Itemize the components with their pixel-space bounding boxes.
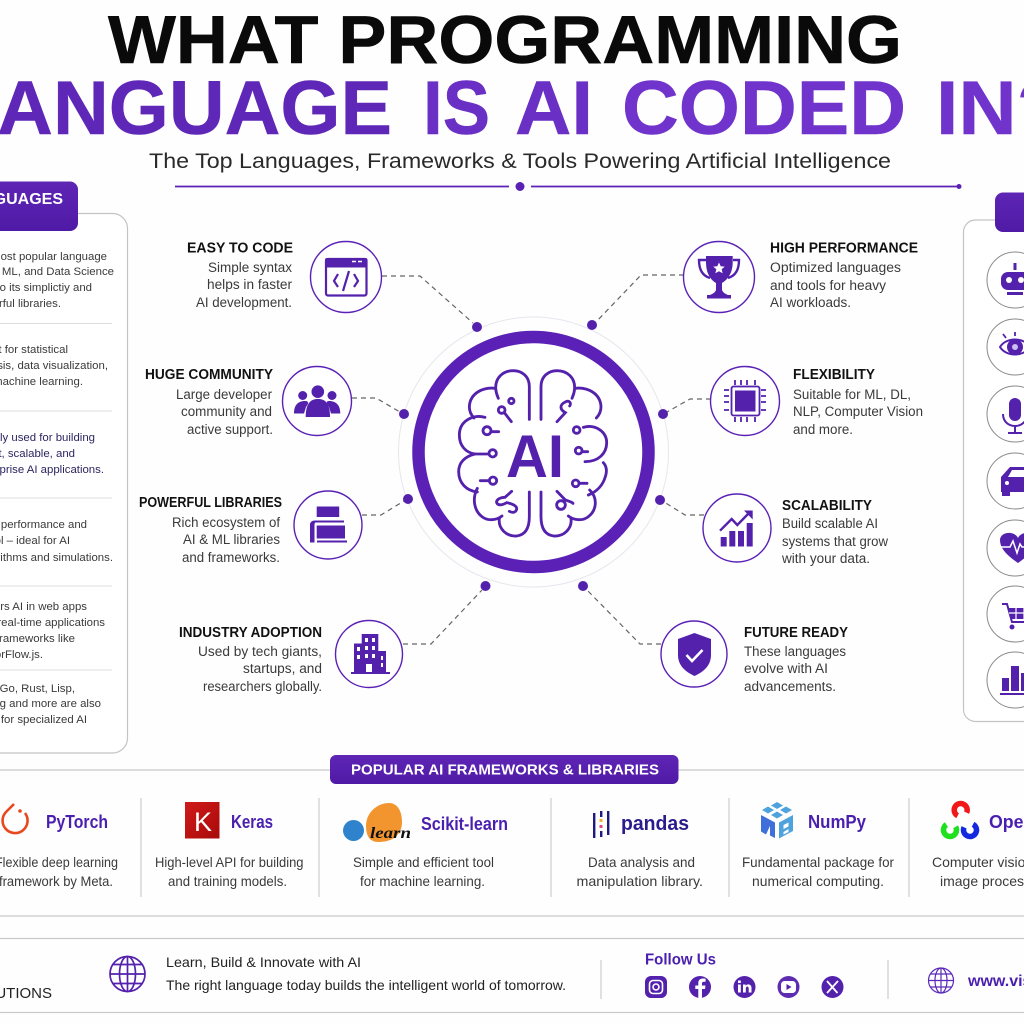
framework: Scikit-learn — [343, 803, 508, 889]
icon: trophy — [699, 256, 739, 298]
feature: huge community: Large developer — [176, 387, 272, 402]
icon: circuit brain — [459, 371, 607, 536]
footer tagline — [166, 954, 566, 993]
framework: Keras: Keras — [231, 812, 273, 832]
feature: scalability: with your data. — [781, 551, 870, 566]
icon: LinkedIn — [734, 976, 756, 998]
icon: heart pulse — [987, 520, 1024, 576]
subtitle: The Top Languages, Frameworks & Tools Powering Artificial Intelligence — [149, 150, 891, 173]
framework: NumPy: Fundamental package for — [742, 854, 894, 870]
framework: Scikit-learn: for machine learning. — [360, 873, 485, 889]
feature: scalability: Build scalable AI — [782, 516, 878, 531]
framework: NumPy: numerical computing. — [752, 873, 884, 889]
framework: PyTorch: framework by Meta. — [0, 873, 113, 889]
logo: pandas — [593, 811, 609, 838]
feature: future ready: evolve with AI — [744, 661, 828, 676]
icon: website globe — [928, 968, 954, 993]
feature: flexibility: Suitable for ML, DL, — [793, 387, 911, 402]
feature: industry adoption: Used by tech giants, — [198, 644, 322, 659]
logo: PyTorch — [3, 804, 28, 833]
section rule lines — [0, 770, 1024, 1012]
frameworks heading: POPULAR AI FRAMEWORKS & LIBRARIES — [351, 762, 659, 778]
feature: industry adoption: startups, and — [243, 661, 322, 676]
footer icon: globe — [110, 956, 145, 992]
title — [0, 2, 1024, 151]
feature: easy to code: Simple syntax — [208, 260, 292, 275]
framework: NumPy — [742, 802, 894, 889]
language text: others — [0, 683, 101, 726]
title divider — [175, 182, 962, 191]
feature: easy to code — [187, 240, 382, 312]
feature: flexibility: FLEXIBILITY — [793, 367, 875, 383]
website — [928, 968, 1024, 993]
icon: shield check — [678, 633, 711, 676]
frameworks heading — [330, 755, 678, 784]
feature: easy to code: AI development. — [196, 295, 292, 310]
connector lines — [352, 275, 711, 644]
icon: microphone — [987, 386, 1024, 442]
feature: future ready: advancements. — [744, 679, 836, 694]
feature: industry adoption — [179, 620, 402, 694]
feature: high performance: HIGH PERFORMANCE — [770, 240, 918, 256]
language text: C++ — [0, 519, 113, 564]
feature: huge community: HUGE COMMUNITY — [145, 367, 273, 383]
connector dots — [399, 320, 668, 591]
framework: pandas: Data analysis and — [588, 854, 695, 870]
icon: Facebook — [689, 976, 711, 998]
follow us — [645, 952, 844, 998]
framework: PyTorch — [0, 804, 118, 889]
framework dividers — [141, 798, 909, 897]
footer tagline: The right language today builds the intelligent world of tomorrow. — [166, 977, 566, 993]
feature: future ready — [661, 621, 848, 694]
feature: scalability: systems that grow — [782, 534, 888, 549]
title: WHAT PROGRAMMING — [108, 2, 902, 78]
feature: powerful libraries: and frameworks. — [182, 550, 280, 565]
icon: car — [987, 453, 1024, 509]
icon: shopping cart — [987, 586, 1024, 642]
icon: people — [294, 385, 340, 417]
title: AI — [515, 66, 593, 151]
feature: powerful libraries: Rich ecosystem of — [172, 515, 280, 530]
framework: OpenCV — [932, 801, 1024, 889]
title: CODED — [622, 66, 906, 151]
logo: Keras — [185, 802, 220, 838]
panel heading: languages — [0, 182, 78, 231]
footer dividers — [601, 960, 888, 999]
icon: processor chip — [724, 380, 766, 422]
follow us: Follow Us — [645, 952, 716, 968]
feature: high performance: AI workloads. — [770, 295, 851, 310]
AI label: AI — [506, 423, 564, 490]
language text: R — [0, 344, 108, 388]
feature: future ready: These languages — [744, 644, 846, 659]
framework: pandas — [576, 811, 703, 889]
framework: Scikit-learn: Simple and efficient tool — [353, 854, 494, 870]
feature: industry adoption: INDUSTRY ADOPTION — [179, 625, 322, 641]
panel: applications — [964, 192, 1024, 722]
icon: code window — [325, 258, 368, 296]
icon: office buildings — [351, 634, 390, 674]
icon: library books — [310, 506, 347, 542]
framework: pandas: pandas — [621, 813, 689, 835]
feature: huge community: active support. — [187, 422, 273, 437]
feature: high performance — [684, 240, 918, 312]
central AI brain emblem — [398, 317, 668, 591]
feature: high performance: and tools for heavy — [770, 278, 886, 293]
logo: Keras: K — [194, 807, 212, 837]
language text: Java — [0, 432, 104, 476]
framework: Keras — [155, 802, 304, 889]
logo: scikit-learn: learn — [370, 825, 411, 842]
panel heading tab — [995, 192, 1024, 232]
feature: powerful libraries: AI & ML libraries — [183, 532, 280, 547]
feature: easy to code: EASY TO CODE — [187, 240, 293, 256]
language text: JavaScript — [0, 601, 105, 661]
icon: eye — [987, 319, 1024, 375]
feature: flexibility: NLP, Computer Vision — [793, 404, 923, 419]
feature: flexibility — [710, 366, 923, 437]
feature: easy to code: helps in faster — [207, 277, 293, 292]
framework: Scikit-learn: Scikit-learn — [421, 814, 508, 834]
feature: huge community: community and — [181, 404, 272, 419]
panel: languages — [0, 182, 128, 753]
feature: scalability — [703, 494, 888, 566]
icon: Instagram — [645, 976, 667, 998]
feature: powerful libraries: POWERFUL LIBRARIES — [139, 495, 282, 511]
icon: robot — [987, 252, 1024, 308]
title: IS — [423, 66, 490, 151]
feature: powerful libraries — [139, 491, 362, 565]
feature: industry adoption: researchers globally. — [203, 679, 322, 694]
logo: OpenCV — [941, 801, 979, 839]
icon: growth chart — [720, 510, 753, 546]
framework: Keras: High-level API for building — [155, 854, 304, 870]
footer tagline: Learn, Build & Innovate with AI — [166, 954, 361, 970]
logo: scikit-learn — [343, 803, 411, 842]
language text: Python — [0, 251, 114, 310]
framework: pandas: manipulation library. — [576, 873, 703, 889]
icon: YouTube — [778, 976, 800, 998]
feature: scalability: SCALABILITY — [782, 498, 872, 514]
icon: bar chart — [987, 652, 1024, 708]
framework: PyTorch: PyTorch — [46, 812, 108, 832]
logo: NumPy — [761, 802, 793, 838]
feature: high performance: Optimized languages — [770, 260, 901, 275]
feature: huge community — [145, 366, 352, 437]
feature: future ready: FUTURE READY — [744, 625, 848, 641]
feature: flexibility: and more. — [793, 422, 853, 437]
framework: Keras: and training models. — [168, 873, 287, 889]
framework: NumPy: NumPy — [808, 812, 866, 832]
icon: X — [822, 976, 844, 998]
